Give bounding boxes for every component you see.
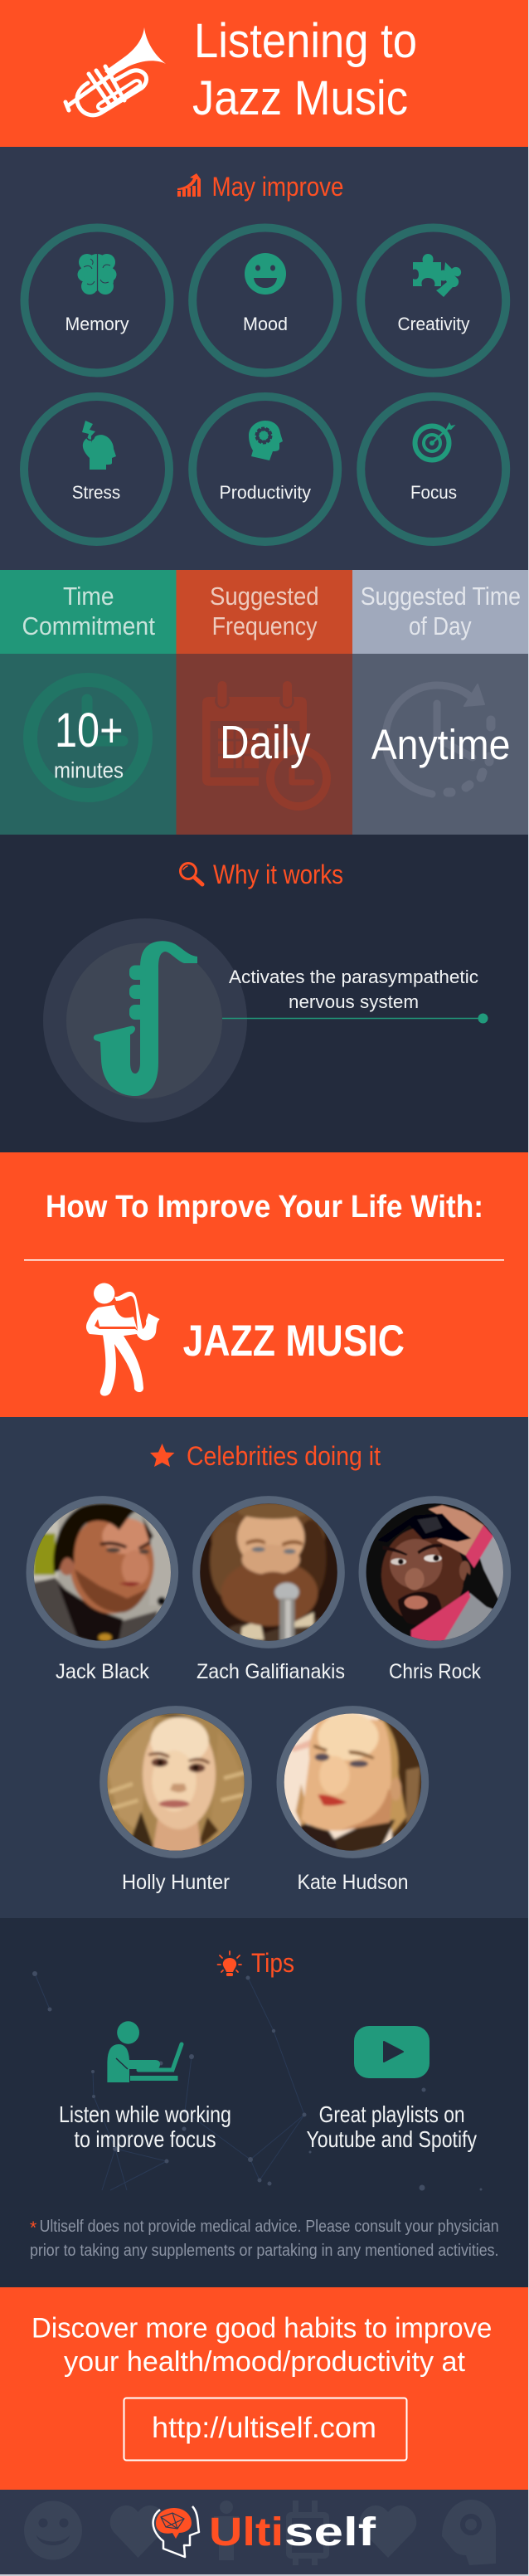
text: great playlists: Great playlists on [319,2101,465,2127]
logo: Ultiself: self [284,2510,376,2554]
value: 10+ minutes [54,704,124,783]
icon: clock with arrow [386,684,491,794]
value: 10+ minutes: minutes [54,758,124,783]
logo: Ultiself [153,2506,376,2557]
icon: play button [354,2026,430,2078]
text: listen while working [59,2101,231,2152]
icon: target [415,422,456,460]
heading: tips: Tips [251,1948,294,1978]
text: great playlists [307,2101,477,2152]
icon: saxophone [43,918,247,1122]
label: jazz music: JAZZ MUSIC [183,1317,405,1366]
panel: tips [0,1918,529,2287]
icon: stress head [82,421,116,470]
heading: suggested frequency: Frequency [212,611,318,640]
star network background [32,1971,483,2190]
heading: time commitment: Time [63,582,114,611]
value: daily: Daily [220,716,311,769]
portrait: Kate Hudson [279,1709,425,1856]
watermark icons [24,2500,496,2565]
icon: trumpet [66,27,166,115]
panel: call to action [0,2287,529,2490]
disclaimer: * [30,2218,36,2238]
heading: suggested frequency: Suggested [210,582,319,611]
celebrity names row 2 [122,1871,408,1894]
icon: person at laptop [107,2021,182,2082]
icon: star [150,1444,174,1467]
benefit labels [65,314,469,503]
callout: parasympathetic [222,967,488,1024]
celebrity names row 1: Jack Black [56,1660,149,1683]
icon: rising chart [177,173,201,197]
icon: light bulb [217,1951,241,1976]
panel: why it works [0,835,529,1152]
panel: how to improve [0,1152,529,1417]
heading: time commitment [22,582,155,640]
rings [24,227,506,542]
panel: time commitment [0,570,176,835]
text: discover more [32,2313,492,2378]
benefit labels: Productivity [219,482,311,503]
heading: how to improve: How To Improve Your Life With: [46,1190,483,1225]
celebrity names row 1: Chris Rock [389,1660,481,1683]
value: 10+ minutes: 10+ [55,704,123,757]
celebrity names row 1: Zach Galifianakis [197,1660,345,1683]
text: listen while working: Listen while working [59,2101,231,2127]
text: great playlists: Youtube and Spotify [307,2126,477,2152]
celebrity names row 2: Holly Hunter [122,1871,230,1894]
heading: suggested frequency [210,582,319,640]
icon: saxophone player [86,1283,159,1396]
heading: suggested time of day [361,582,521,640]
callout: parasympathetic: Activates the parasympathetic [229,967,478,987]
logo: Ultiself: Ulti [209,2510,284,2554]
text: discover more: Discover more good habits to improve [32,2313,492,2345]
icon: calendar with clock [202,681,327,806]
heading: time commitment: Commitment [22,611,155,640]
title: Jazz Music [192,71,408,125]
disclaimer [30,2218,499,2260]
benefit labels: Creativity [398,314,469,334]
header banner [0,0,529,147]
value: anytime: Anytime [371,721,510,768]
portrait: Zach Galifianakis [197,1497,341,1649]
link box [124,2398,406,2461]
heading: why it works: Why it works [213,859,343,889]
icon: productivity head [249,421,283,460]
title [192,14,417,125]
callout: parasympathetic: nervous system [289,991,419,1012]
celebrity names row 1 [56,1660,481,1683]
heading: may improve: May improve [212,172,343,202]
icon: clock [30,680,146,795]
panel: celebrities [27,1444,511,1893]
panel: footer [0,2490,529,2574]
benefit labels: Stress [72,482,120,503]
portrait: Jack Black [27,1497,177,1655]
benefit labels: Focus [410,482,457,503]
icon: magnifying glass [181,863,202,884]
heading: celebrities: Celebrities doing it [187,1441,381,1471]
panel: suggested time of day [352,570,529,835]
benefit labels: Memory [65,314,129,334]
celebrity names row 2: Kate Hudson [297,1871,408,1894]
text: discover more: your health/mood/productivity at [64,2346,466,2378]
text: listen while working: to improve focus [75,2126,216,2152]
link box: http://ultiself.com [152,2412,376,2444]
icon: brain [78,253,116,295]
icon: puzzle pieces [413,254,461,297]
portrait: Holly Hunter [102,1709,249,1856]
portrait: Chris Rock [362,1500,508,1644]
panel: may improve [0,147,529,570]
title: Listening to [194,14,417,68]
icon: smiley [245,253,286,295]
benefit labels: Mood [243,314,288,334]
panel: suggested frequency [176,570,352,835]
heading: suggested time of day: of Day [409,611,472,640]
